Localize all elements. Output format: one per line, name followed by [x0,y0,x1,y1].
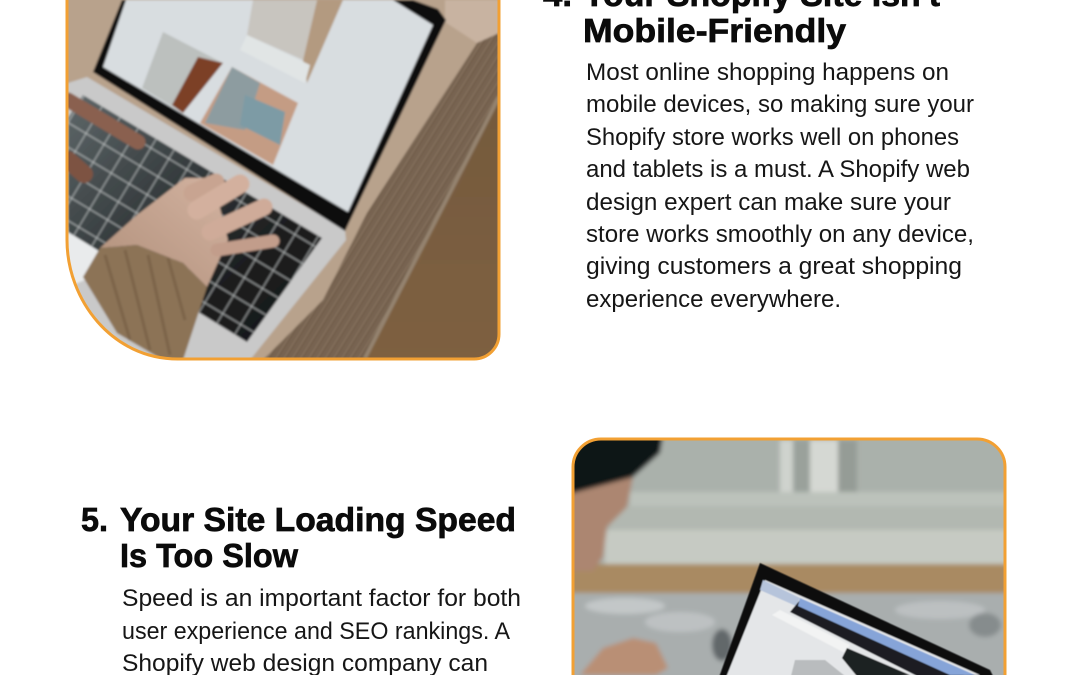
body text: section 4: and tablets is a must. A Shopify web [586,156,970,183]
heading: section 5: Your Site Loading Speed [120,501,516,538]
body text: section 4: giving customers a great shopping [586,253,962,280]
body text: section 4 [586,59,974,313]
panel: person using laptop photo with orange frame [565,430,1015,675]
body text: section 4: mobile devices, so making sure your [586,91,974,118]
section 4 text [543,0,974,313]
photo: person looking at laptop [565,430,1015,675]
heading: section 5: Is Too Slow [120,537,298,574]
section 5 text [81,501,521,675]
body text: section 5: user experience and SEO rankings. A [122,618,510,645]
body text: section 5: Speed is an important factor for both [122,585,521,612]
body text: section 5 [122,585,521,675]
body text: section 4: Shopify store works well on phones [586,124,959,151]
frame: orange outline [573,439,1005,675]
heading: section 5: 5. [81,501,108,538]
frame: orange outline [67,0,499,359]
heading: section 4 [543,0,940,49]
laptop: open screen [718,563,995,675]
panel: laptop photo with orange frame [60,0,510,370]
body text: section 4: store works smoothly on any device, [586,221,974,248]
body text: section 4: design expert can make sure your [586,189,951,216]
heading: section 5 [81,501,516,574]
body text: section 4: Most online shopping happens on [586,59,949,86]
body text: section 4: experience everywhere. [586,286,841,313]
heading: section 4: Mobile-Friendly [583,12,847,49]
photo: hands typing on laptop [60,0,510,370]
